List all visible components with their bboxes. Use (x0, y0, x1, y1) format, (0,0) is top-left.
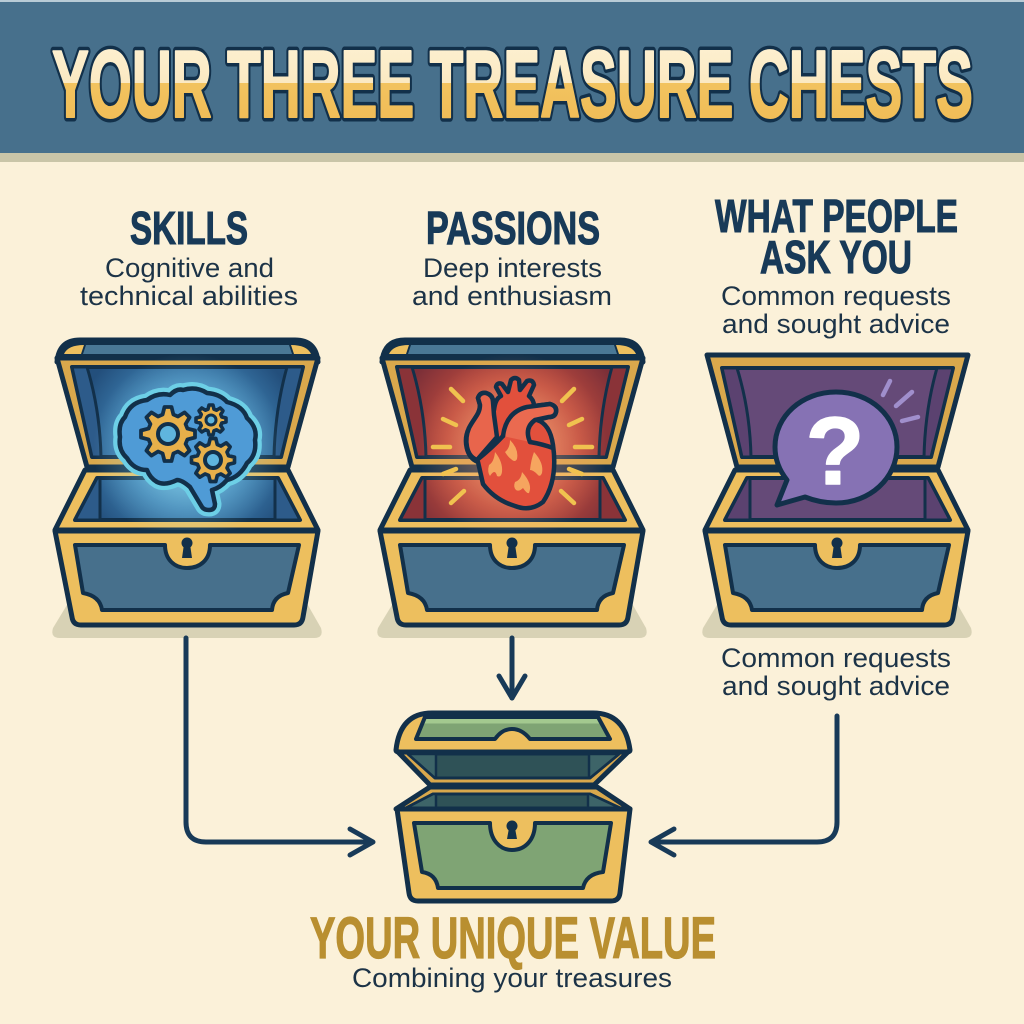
text: what people ask you repeat: Common requests (721, 643, 951, 673)
text: what people ask you repeat (721, 643, 951, 701)
heading: what people ask you (715, 190, 958, 339)
heading: what people ask you: ASK YOU (760, 231, 912, 283)
arrow: skills to unique value (186, 638, 373, 855)
icon: speech bubble with question mark: ? (806, 398, 864, 505)
heading: skills: SKILLS (130, 202, 248, 254)
heading: skills: technical abilities (80, 281, 298, 311)
heading: passions: Deep interests (423, 253, 602, 283)
heading: your unique value: YOUR UNIQUE VALUE (310, 906, 716, 971)
heading: what people ask you: Common requests (721, 281, 951, 311)
icon: heart rays (433, 389, 592, 503)
heading: skills (80, 202, 298, 311)
chest: skills (52, 340, 322, 638)
heading: skills: Cognitive and (105, 253, 274, 283)
text: what people ask you repeat: and sought advice (722, 671, 950, 701)
icon: brain with gears (120, 389, 256, 510)
glow: skills (70, 340, 310, 530)
arrow: what people ask to unique value (651, 716, 837, 855)
arrow: passions to unique value (499, 638, 525, 698)
glow: passions (395, 340, 635, 530)
icon: speech bubble with question mark (775, 381, 918, 505)
caption: combining your treasures: Combining your treasures (352, 963, 672, 993)
heading: passions: PASSIONS (426, 202, 600, 254)
title banner (0, 0, 1024, 162)
chest: passions (377, 340, 647, 638)
heading: passions (412, 202, 612, 311)
heading: what people ask you: and sought advice (722, 309, 950, 339)
chest: what people ask you (702, 355, 972, 638)
heading: passions: and enthusiasm (412, 281, 612, 311)
chest: unique value (396, 713, 630, 901)
icon: heart (466, 378, 556, 508)
